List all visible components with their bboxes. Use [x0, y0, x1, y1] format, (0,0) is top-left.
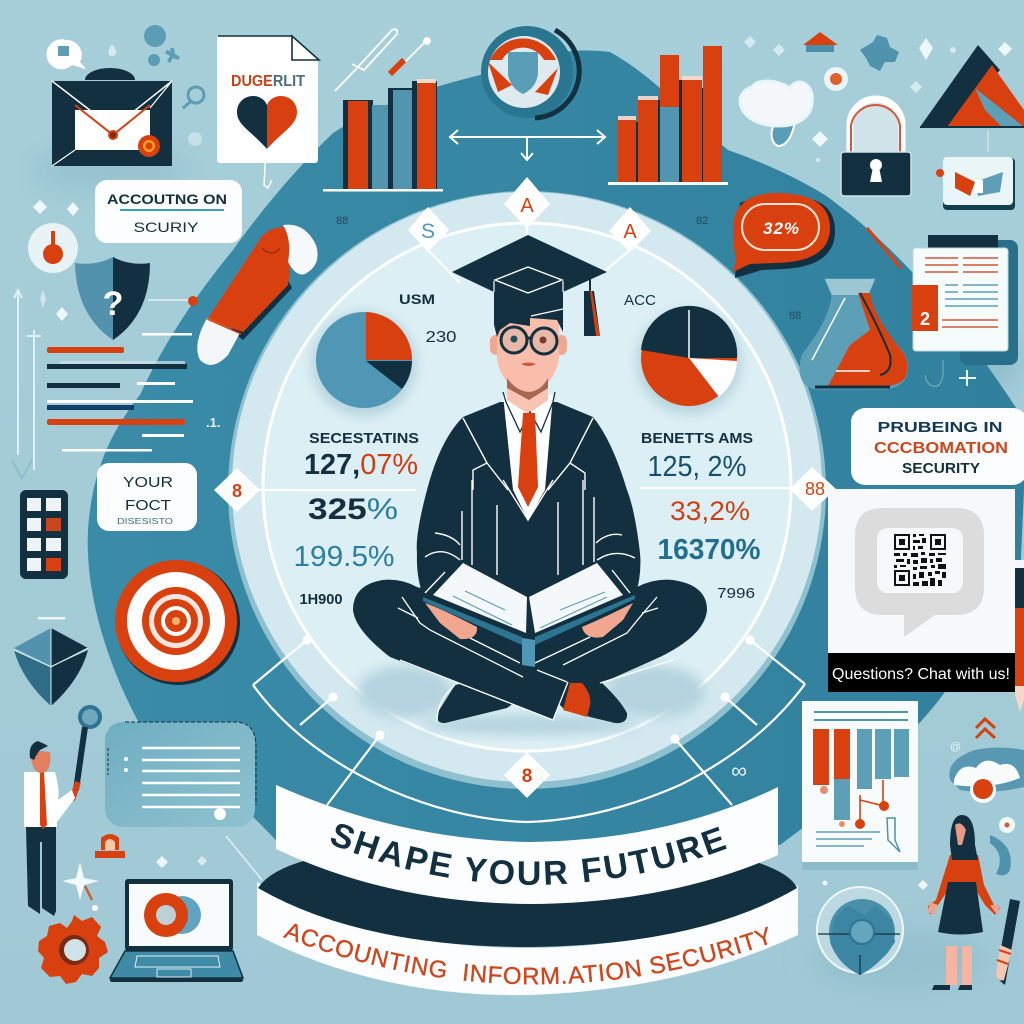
decorative soft shadows [30, 148, 1020, 990]
text box: Accounting on security [95, 180, 242, 243]
panel: report document: 2 [920, 309, 930, 329]
pie labels: ACC [624, 292, 656, 309]
connector frame lines [235, 218, 812, 822]
icon: roof [803, 32, 838, 52]
icon: red line [867, 228, 901, 268]
note: one-dot: .1. [206, 415, 220, 430]
icon: bottom-right cloud [949, 741, 1024, 803]
teal ring band [88, 51, 1024, 845]
text box: Your Foct: DISESISTO [117, 517, 173, 526]
connector line [226, 836, 262, 880]
arrows: horizontal and down [450, 130, 605, 160]
stats column: left [294, 430, 419, 608]
chart: right pie [637, 306, 741, 414]
widget: chat card [828, 489, 1015, 654]
icon: red stamp [95, 834, 125, 858]
title: SHAPE YOUR FUTURE [331, 824, 727, 886]
panel: document with heart [217, 36, 319, 188]
vertical arrows [12, 290, 41, 478]
head [490, 318, 567, 400]
icon: infinity: ∞ [731, 758, 747, 783]
hair [494, 283, 563, 337]
icon: cloud [740, 81, 812, 146]
text box: Your Foct: YOUR [123, 474, 173, 491]
diamond badges: A [623, 221, 637, 243]
icon: right edge pen [1015, 560, 1024, 712]
list bars [47, 333, 193, 452]
small numbers: 88 [789, 310, 801, 322]
icon: shield question: ? [103, 285, 123, 323]
chart: left pie [312, 312, 416, 416]
icon: chat bubble outline [855, 508, 984, 637]
widget: caption bar: Questions? Chat with us! [832, 666, 1010, 683]
icon: heart [237, 96, 297, 188]
text box: Prubeing in: SECURITY [902, 461, 980, 477]
icon: puzzle cross [860, 35, 899, 71]
stats column: right: 125, 2% [648, 451, 746, 483]
text box: Your Foct: FOCT [125, 497, 171, 514]
figure: woman [822, 815, 1015, 990]
figure: man with magnifier [24, 707, 100, 916]
icon: gear [38, 915, 108, 984]
icon: orange dot [824, 67, 848, 91]
text box: Accounting on security: SCURIY [134, 219, 199, 235]
icon: kite shield [14, 617, 88, 706]
icon: padlock [841, 99, 911, 196]
diamond badges: 8 [232, 481, 242, 501]
text box: Your Foct [97, 463, 197, 531]
pie labels: USM [399, 291, 435, 307]
callout: percent bubble: 32% [763, 219, 799, 238]
icon: shield question [75, 257, 198, 340]
icon: open box [936, 157, 1015, 210]
banner: upper ribbon [276, 785, 778, 904]
stats column: left: 1H900 [300, 591, 342, 608]
small numbers: 82 [696, 215, 708, 227]
diamond badges [214, 177, 836, 798]
text box: Prubeing in [851, 408, 1024, 485]
icon: target [115, 560, 240, 685]
graduation cap [452, 235, 607, 336]
document heading: DUGERLIT [231, 73, 305, 90]
outer light ring [228, 191, 826, 789]
stats column: right: 7996 [717, 585, 755, 602]
jacket seams [425, 418, 635, 593]
stats column: left: 199.5% [294, 541, 394, 573]
jacket [417, 402, 640, 600]
figure: graduate [353, 235, 707, 723]
qr code [894, 534, 946, 586]
small sparkle star [62, 856, 207, 911]
icon: small cogs [108, 25, 204, 146]
icon: chevrons [976, 719, 995, 738]
icon: red pin badge [28, 223, 78, 273]
open book [423, 563, 635, 667]
decorative left diamonds [33, 200, 79, 321]
callout: percent bubble [733, 193, 835, 278]
floor shadow [357, 666, 705, 735]
pie labels: 230 [426, 329, 457, 346]
icon: bottom-right cloud: @ [950, 741, 961, 753]
icon: triangle [920, 45, 1024, 152]
stats column: right: BENETTS AMS [641, 430, 753, 447]
bar chart: left [323, 79, 443, 192]
small numbers: 88 [336, 215, 348, 227]
panel: screen with list lines [105, 722, 256, 827]
icon: laptop [110, 879, 243, 982]
icon: envelope [52, 68, 172, 166]
small numbers [336, 215, 801, 322]
banner: lower ribbon [257, 861, 798, 996]
icon: red capsule [197, 225, 318, 365]
ribbon label: ACCOUNTING INFORM.ATION SECURITY [282, 924, 768, 984]
widget: caption bar [828, 653, 1015, 692]
diamond badges: S [421, 220, 435, 243]
icon: pencil [996, 899, 1020, 985]
neck and collar [503, 378, 555, 520]
diamond badges: 8 [522, 766, 532, 787]
text box: Prubeing in: CCCBOMATION [874, 440, 1008, 457]
icon: flask [800, 279, 908, 389]
diamond badges: 8 [815, 479, 825, 499]
stats column: right [641, 430, 761, 602]
stats column: left: 127,07% [304, 449, 418, 481]
decorative diamonds [744, 36, 1012, 162]
stats column: left: 325 % [308, 493, 398, 526]
stats column: right: 16370% [658, 534, 761, 566]
icon: plus and hook [925, 360, 976, 386]
panel: report document [912, 235, 1018, 365]
icon: calculator [20, 490, 68, 579]
icon: globe [817, 887, 903, 975]
legs [353, 580, 707, 723]
panel: hanging bar chart [802, 701, 918, 870]
diamond badges: A [520, 195, 534, 217]
pie labels [399, 291, 656, 346]
icon: speech bubble [46, 39, 86, 69]
text box: Accounting on security: ACCOUTNG ON [107, 191, 227, 207]
bar chart: right [608, 46, 728, 185]
icon: emblem circle [481, 26, 579, 118]
inner circle panel [263, 223, 791, 751]
stats column: left: SECESTATINS [309, 430, 419, 447]
stats column: right: 33,2% [670, 496, 750, 526]
icon: pen tools [335, 29, 430, 91]
diamond badges: 8 [805, 479, 815, 499]
text box: Prubeing in: PRUBEING IN [878, 419, 1002, 436]
